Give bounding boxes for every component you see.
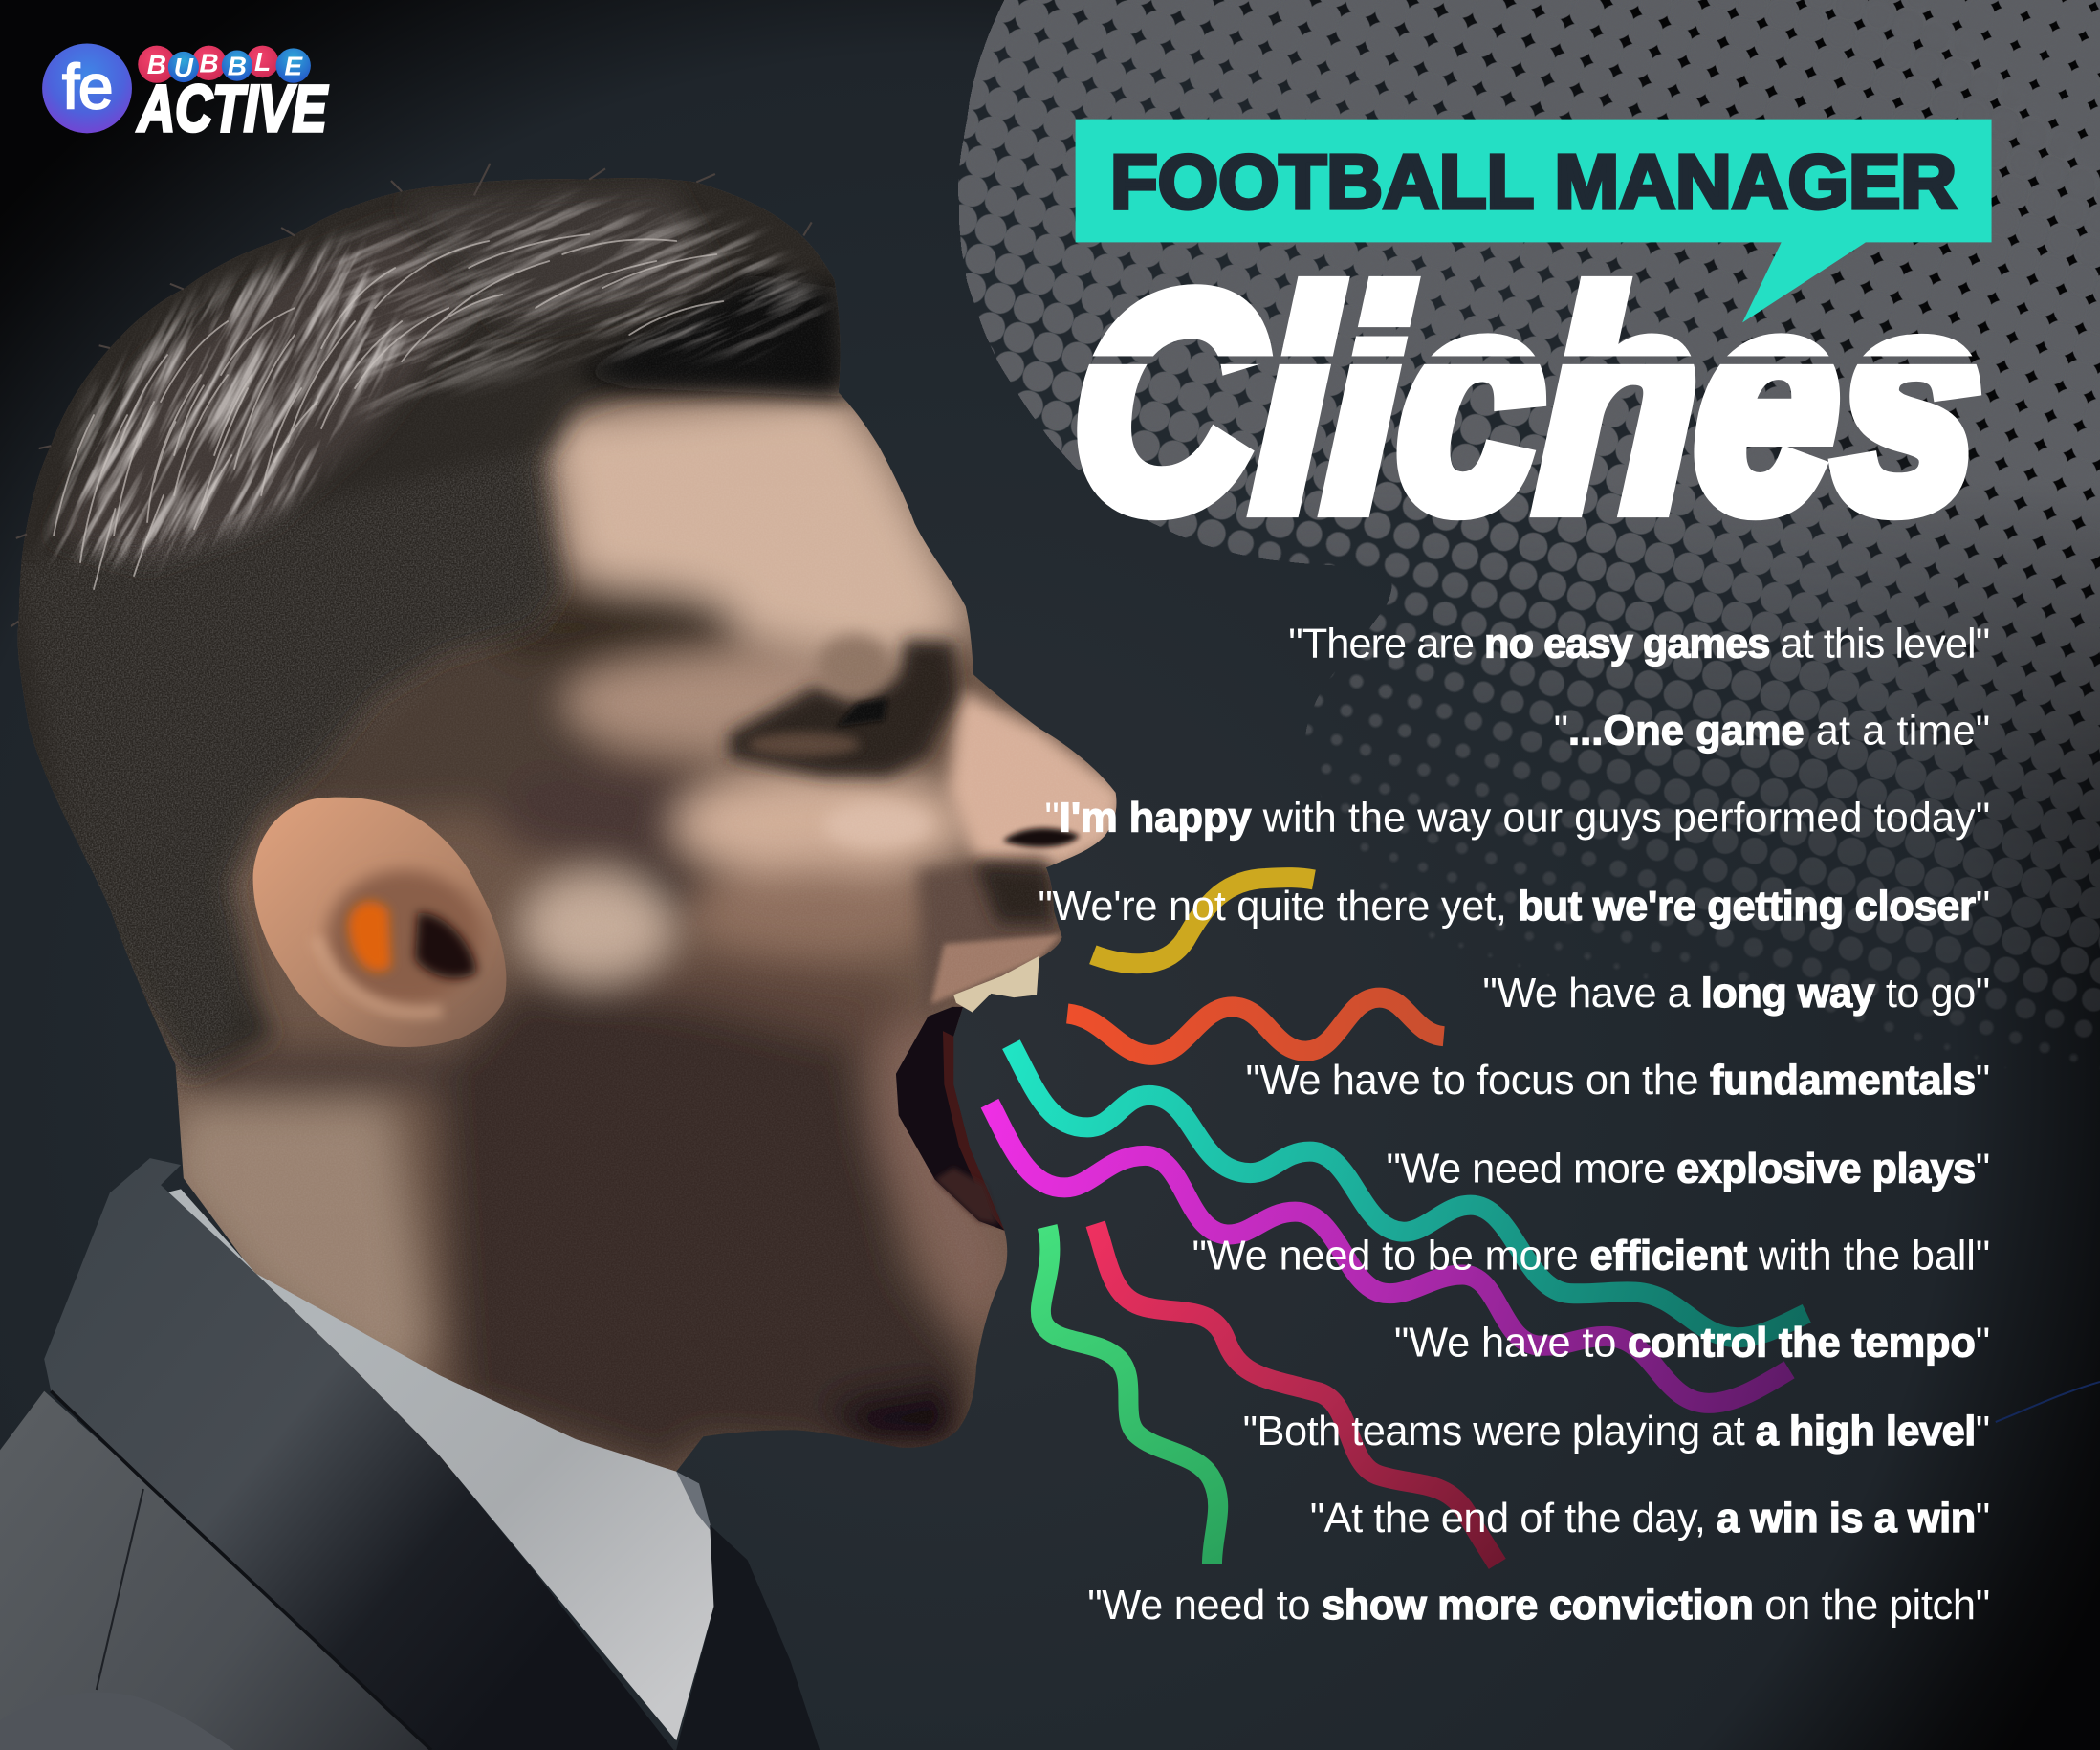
quote 12: "We need to show more conviction on the pitch" (1087, 1583, 1990, 1629)
man shouting in profile (0, 163, 1117, 1750)
logo: bubble letters: B (147, 50, 166, 79)
lower teeth (935, 1168, 997, 1224)
head and neck (17, 178, 1117, 1473)
list of manager cliches (1038, 621, 1990, 1629)
logo: ACTIVE wordmark: ACTIVE (137, 72, 328, 145)
squiggle: yellow (1093, 878, 1314, 964)
individual strands (54, 234, 723, 589)
crown streak texture (0, 0, 1371, 1055)
suit shoulder (0, 1391, 431, 1750)
shirt collar (154, 1189, 713, 1740)
quote 11: "At the end of the day, a win is a win" (1310, 1496, 1990, 1542)
logo: bubble letters: U (174, 53, 194, 82)
jacket lapel (44, 1158, 673, 1750)
hair (0, 0, 1371, 1229)
quote 5: "We have a long way to go" (1482, 971, 1990, 1017)
faint blue arc (1996, 1382, 2100, 1422)
quote 8: "We need to be more efficient with the ball" (1192, 1233, 1990, 1279)
nose (949, 689, 1125, 870)
logo: bubble letters: B (228, 51, 247, 80)
quote 2: "...One game at a time" (1554, 708, 1990, 754)
logo: bubble letters: B (199, 49, 219, 78)
quote 4: "We're not quite there yet, but we're getting closer" (1038, 884, 1990, 930)
mouth interior (896, 1007, 1004, 1231)
bubble shape (1076, 120, 1992, 322)
logo: bubble letters: E (284, 51, 303, 80)
logo: bubble letters (138, 46, 311, 83)
hair wisps on the outline (11, 164, 812, 626)
title speech bubble (1076, 120, 1992, 322)
ear (253, 798, 506, 1047)
eye socket (729, 635, 959, 777)
quote 1: "There are no easy games at this level" (1288, 621, 1990, 667)
quote 10: "Both teams were playing at a high level" (1243, 1409, 1990, 1455)
logo: fe globe (42, 44, 132, 133)
squiggle: teal (1011, 1044, 1806, 1338)
squiggle: orange (1067, 997, 1444, 1055)
quote 9: "We have to control the tempo" (1394, 1320, 1990, 1366)
soft skin shading (17, 178, 1117, 1473)
quote 6: "We have to focus on the fundamentals" (1245, 1058, 1990, 1104)
nostril (1003, 828, 1080, 847)
logo: fe globe: fe (62, 51, 112, 121)
squiggle: green (1040, 1227, 1218, 1564)
quote 3: "I'm happy with the way our guys performed today" (1044, 795, 1990, 841)
tie (676, 1472, 820, 1750)
cheek highlight (823, 802, 930, 847)
logo: bubble letters: L (254, 47, 271, 77)
squiggle: magenta (990, 1104, 1789, 1403)
squiggle: crimson (1096, 1224, 1498, 1564)
heading: Football Manager: FOOTBALL MANAGER (1110, 140, 1957, 225)
logo (42, 44, 328, 145)
heading: Cliches: Cliches (1065, 230, 1989, 572)
hair streak texture (0, 0, 1080, 1229)
mouth (896, 956, 1039, 1231)
side stubble (0, 402, 602, 1151)
throat rim (943, 1031, 1004, 1231)
upper lip and stubble (919, 857, 1062, 1017)
upper teeth (953, 956, 1039, 1013)
halftone dot pattern (958, 0, 2100, 1061)
quote 7: "We need more explosive plays" (1387, 1146, 1990, 1192)
